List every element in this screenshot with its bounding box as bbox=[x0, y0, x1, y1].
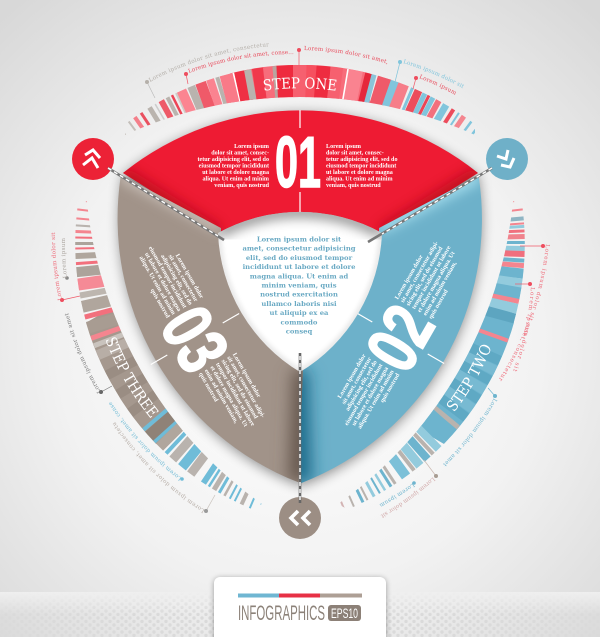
centre text: magna aliqua. Ut enim ad bbox=[250, 272, 348, 280]
dotted footer strip bbox=[0, 592, 600, 637]
centre text: minim veniam, quis bbox=[261, 282, 337, 290]
stripe band: step two bbox=[340, 201, 525, 508]
right text block: Lorem ipsum dolor bbox=[394, 254, 425, 301]
stitched seam: red and blue bbox=[368, 168, 492, 242]
right text block: sit amet, consectetur adipi- bbox=[225, 355, 265, 419]
left text block: veniam, quis nostrud bbox=[214, 183, 270, 189]
left text block: ut labore et dolore magna bbox=[351, 366, 390, 427]
stitched seam: red and taupe bbox=[108, 168, 224, 240]
panel: step three (taupe) bbox=[118, 178, 303, 482]
centre text: Lorem ipsum dolor sit bbox=[257, 236, 342, 244]
divider ticks bbox=[299, 110, 301, 212]
number 01: 01 bbox=[275, 123, 321, 203]
left text block: Lorem ipsum bbox=[234, 144, 269, 150]
centre text: amet, consectetur adipisicing bbox=[242, 245, 356, 253]
stripe band: step three bbox=[75, 201, 262, 508]
callouts around step three: Lorem ipsum dolor sit amet, bbox=[64, 313, 100, 394]
right text block: eiusmod tempor incididunt bbox=[326, 164, 396, 170]
wordmark: INFOGRAPHICS bbox=[238, 602, 325, 625]
left text block: ut labore et dolore magna bbox=[143, 252, 182, 313]
callouts around step three: Lorem ipsum dolor sit amet, conse bbox=[109, 402, 182, 481]
right text block: ut labore et dolore magna bbox=[326, 170, 393, 176]
callouts around step one: Lorem ipsum dolor sit amet, bbox=[304, 46, 388, 64]
step three label: STEP THREE bbox=[106, 337, 159, 418]
callouts around step two bbox=[379, 244, 550, 518]
left text block: eiusmod tempor incididunt bbox=[344, 363, 384, 427]
left text block: dolor sit amet, consec- bbox=[211, 150, 269, 156]
panel: step two (blue) bbox=[301, 178, 482, 483]
centre shield bbox=[218, 212, 382, 372]
centre text: incididunt ut labore et dolore bbox=[243, 263, 356, 271]
callouts around step two: Lorem ipsum dolor sit bbox=[513, 287, 535, 372]
centre text: commodo bbox=[281, 318, 318, 326]
left text block: Lorem ipsum dolor bbox=[174, 253, 204, 300]
left text block: aliqua. Ut enim ad minim bbox=[137, 255, 176, 316]
callouts around step two: Lorem ipsum dolor sit bbox=[380, 477, 436, 518]
callouts around step two: Lorem ipsum dolor sit amet bbox=[443, 398, 498, 466]
right text block: Lorem ipsum bbox=[326, 144, 361, 150]
step two label: STEP TWO bbox=[446, 344, 490, 412]
left text block: quis nostrud bbox=[149, 288, 171, 320]
left text block: sit amet, consectetur bbox=[341, 356, 373, 406]
callouts around step one: Lorem ipsum dolor sit amet, consectetur bbox=[148, 43, 269, 82]
left text block: adipisicing elit, sed do bbox=[159, 254, 193, 306]
callouts around step two: Lorem ipsum bbox=[379, 484, 415, 506]
left text block: aliqua. Ut enim ad minim bbox=[357, 369, 396, 430]
number 03: 03 bbox=[144, 294, 244, 385]
left text block: eiusmod tempor incididunt bbox=[199, 164, 269, 170]
left text block: adipisicing elit, sed do bbox=[345, 360, 379, 412]
divider ticks bbox=[151, 314, 239, 364]
centre text: elit, sed do eiusmod tempor bbox=[246, 254, 353, 262]
callouts around step three: Lorem ipsum bbox=[61, 238, 67, 278]
icon: blue arrow button bbox=[486, 138, 528, 180]
icon: taupe arrow button bbox=[279, 497, 321, 539]
right text block: sicing elit, sed do eiusmod bbox=[220, 359, 259, 420]
centre text: nostrud exercitation bbox=[260, 291, 338, 299]
left text block: ut labore et dolore magna bbox=[202, 170, 269, 176]
right text block: et dolore magna aliqua. Ut bbox=[417, 251, 457, 314]
left text block: sit amet, consectetur bbox=[167, 254, 199, 303]
callouts around step one: Lorem ipsum dolor sit bbox=[403, 59, 464, 88]
right text block: tempor incididunt ut labore bbox=[411, 245, 453, 311]
panel: step one (red) bbox=[123, 110, 478, 233]
stripe band: step one bbox=[125, 64, 475, 135]
right text block: dolor sit amet, consec- bbox=[326, 150, 384, 156]
right text block: quis nostrud bbox=[197, 372, 219, 404]
right text block: tempor incididunt ut labore bbox=[214, 362, 255, 428]
right text block: Lorem ipsum dolor bbox=[231, 352, 261, 399]
callouts around step three: Lorem ipsum dolor sit bbox=[50, 232, 62, 300]
EPS10 badge bbox=[328, 605, 361, 621]
right text block: enim ad minim veniam, bbox=[203, 368, 239, 425]
right text block: tetur adipisicing elit, sed do bbox=[326, 157, 398, 163]
left text block: eiusmod tempor incididunt bbox=[147, 246, 187, 310]
callouts around step one bbox=[145, 43, 464, 98]
colour bar bbox=[238, 594, 362, 598]
step one label: STEP ONE bbox=[264, 77, 336, 91]
right text block: sicing elit, sed do eiusmod bbox=[406, 246, 445, 307]
drop shadow of the panel trio bbox=[119, 113, 482, 486]
callouts around step two: Lorem ipsum dolor sit amet, consectetur bbox=[499, 244, 550, 382]
left text block: aliqua. Ut enim ad minim bbox=[202, 176, 269, 182]
right text block: veniam, quis nostrud bbox=[326, 183, 381, 189]
footer card bbox=[214, 577, 386, 637]
centre text: ut aliquip ex ea bbox=[270, 309, 329, 317]
left text block: tetur adipisicing elit, sed do bbox=[198, 157, 269, 163]
right text block: enim ad minim veniam, bbox=[422, 261, 459, 317]
callouts around step three bbox=[50, 232, 216, 514]
EPS10 badge: EPS10 bbox=[331, 605, 358, 621]
left text block: quis nostrud bbox=[380, 372, 402, 404]
icon: red arrow button bbox=[72, 138, 114, 180]
callouts around step one: Lorem ipsum bbox=[419, 74, 456, 95]
centre text: conseq bbox=[286, 328, 312, 336]
callouts around step three: Lorem ipsum dolor sit amet, consectetur bbox=[113, 422, 204, 514]
right text block: quis nostrud bbox=[428, 288, 450, 320]
centre text: ullamco laboris nisi bbox=[261, 300, 337, 308]
number 02: 02 bbox=[351, 293, 451, 384]
left text block: Lorem ipsum dolor bbox=[337, 353, 368, 400]
divider ticks bbox=[356, 312, 444, 364]
right text block: aliqua. Ut enim ad minim bbox=[326, 176, 393, 182]
callouts around step one: Lorem ipsum dolor sit amet, conse... bbox=[188, 51, 294, 73]
right text block: sit amet, consectetur adipi- bbox=[400, 240, 440, 304]
stitched seam: blue and taupe bbox=[299, 353, 301, 503]
right text block: et dolore magna aliqua. Ut bbox=[208, 365, 248, 428]
